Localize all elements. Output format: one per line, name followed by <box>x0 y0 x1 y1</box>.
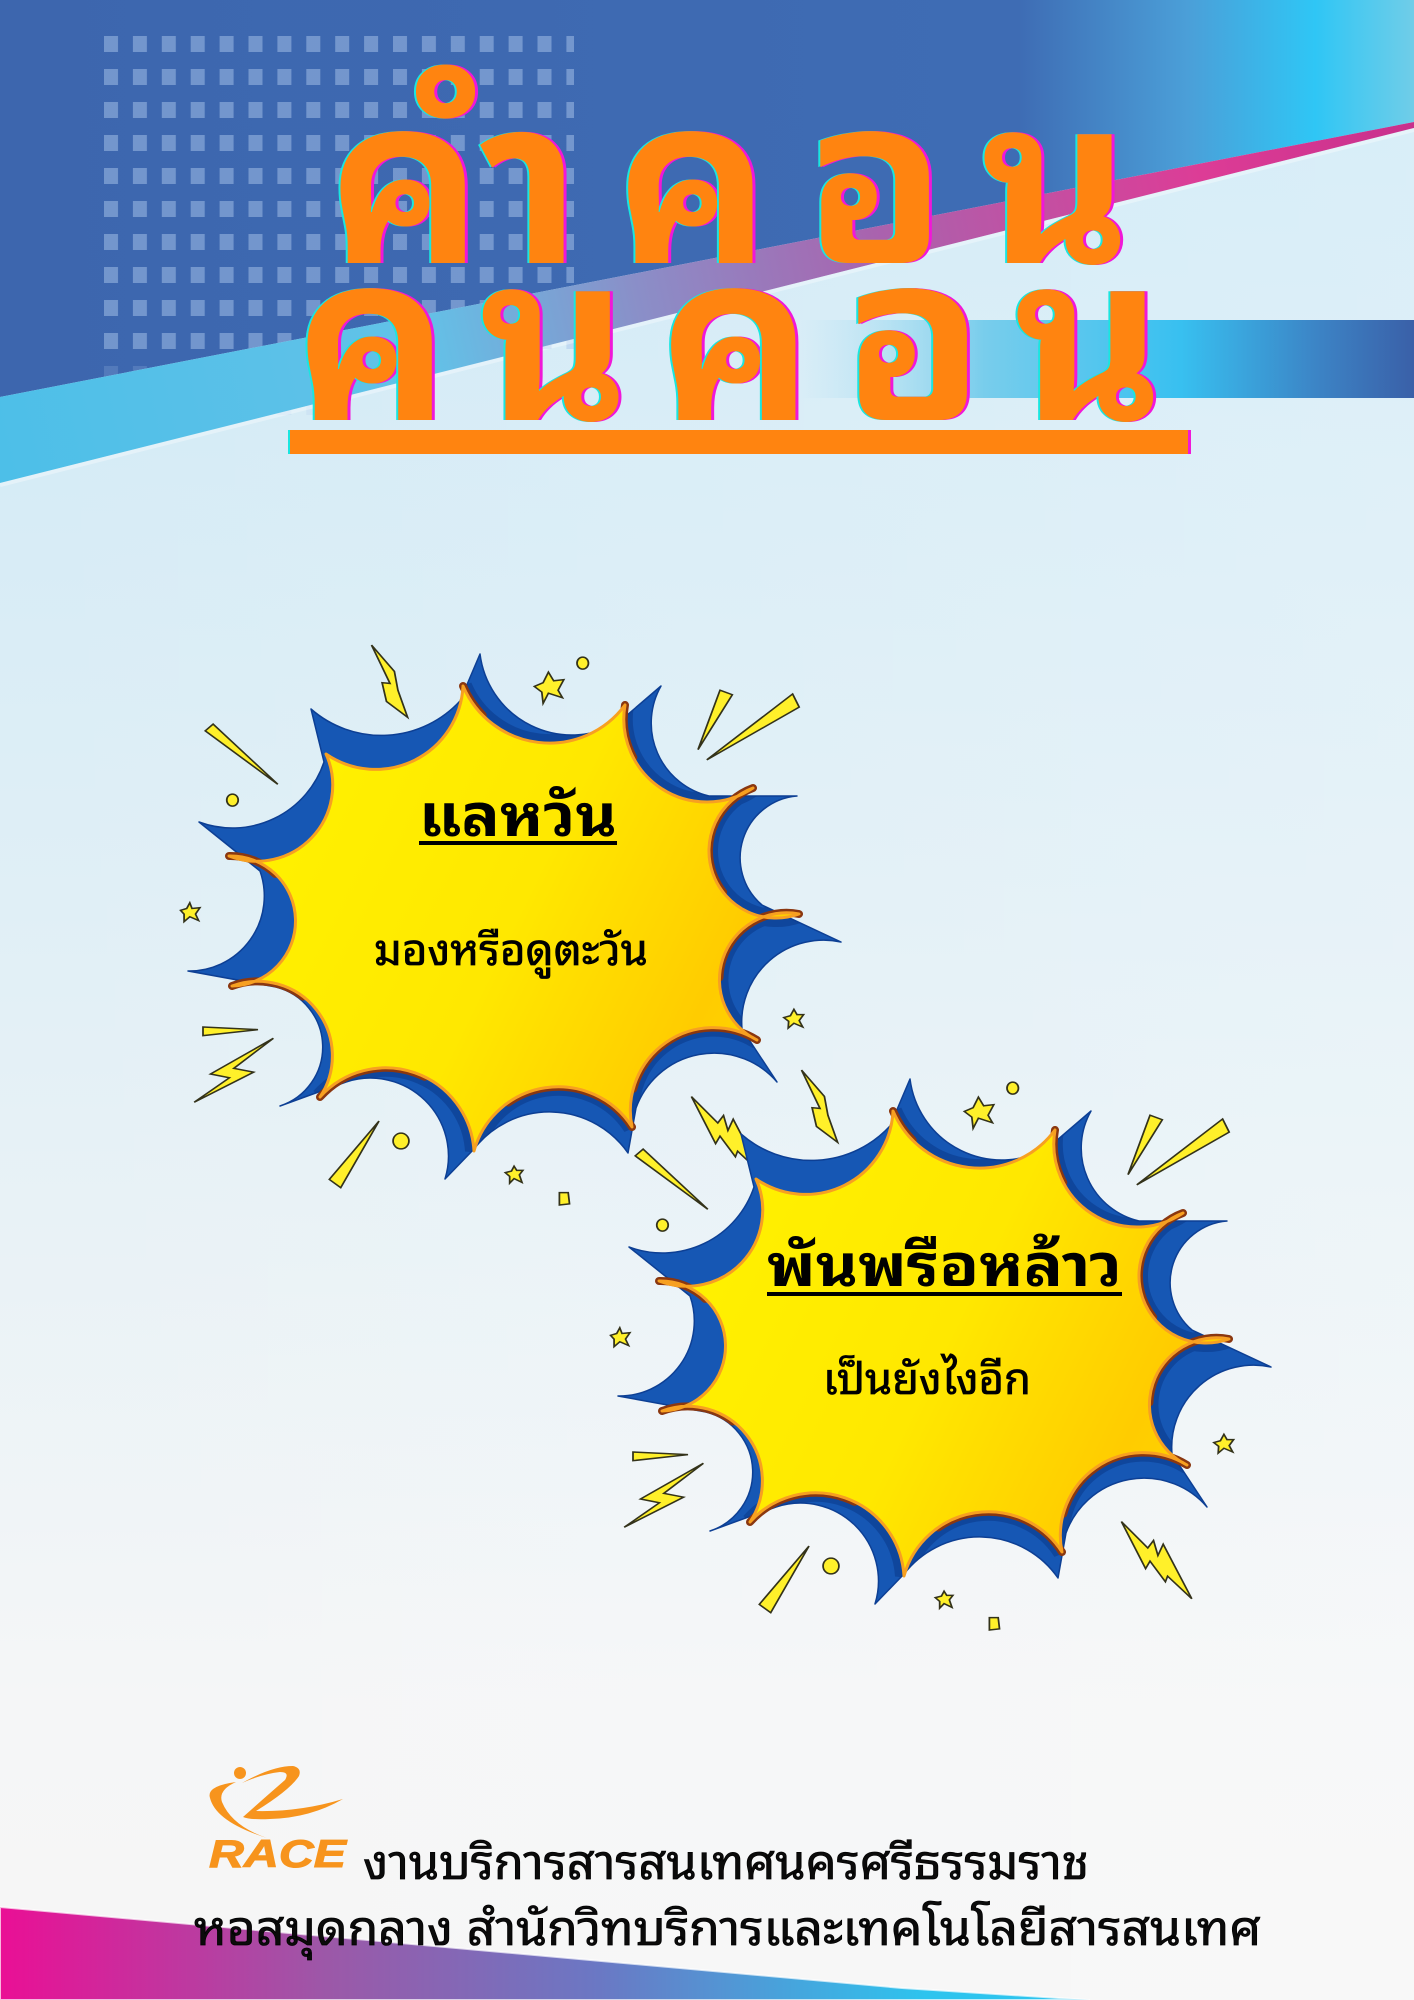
burst 1 body text: มองหรือดูตะวัน <box>374 927 648 978</box>
footer line 2: หอสมุดกลาง สำนักวิทบริการและเทคโนโลยีสารสนเทศ <box>194 1901 1261 1960</box>
footer line 1: งานบริการสารสนเทศนครศรีธรรมราช <box>363 1837 1089 1890</box>
burst 2 artwork <box>611 1070 1271 1630</box>
logo wordmark: RACE <box>209 1833 347 1876</box>
bottom gradient wedge <box>0 1907 1090 2000</box>
burst 1 artwork <box>181 645 841 1205</box>
logo swoosh <box>210 1766 343 1838</box>
burst 2 <box>611 1070 1271 1630</box>
top blue panel <box>0 0 1414 397</box>
burst 1 heading: แลหวัน <box>419 784 617 849</box>
burst 1 <box>181 645 841 1205</box>
title underline <box>290 430 1188 454</box>
burst 2 body text: เป็นยังไงอีก <box>823 1354 1031 1404</box>
title: line 2: คนคอน <box>295 212 1164 469</box>
diagonal wedge <box>0 122 1414 483</box>
burst 2 heading: พันพรือหล้าว <box>767 1234 1122 1299</box>
title: line 1: คำคอน <box>328 55 1131 312</box>
right horizontal band <box>800 320 1414 398</box>
dot grid decoration <box>104 36 574 432</box>
logo: RACE <box>209 1766 347 1876</box>
wedge highlight <box>0 130 1414 485</box>
